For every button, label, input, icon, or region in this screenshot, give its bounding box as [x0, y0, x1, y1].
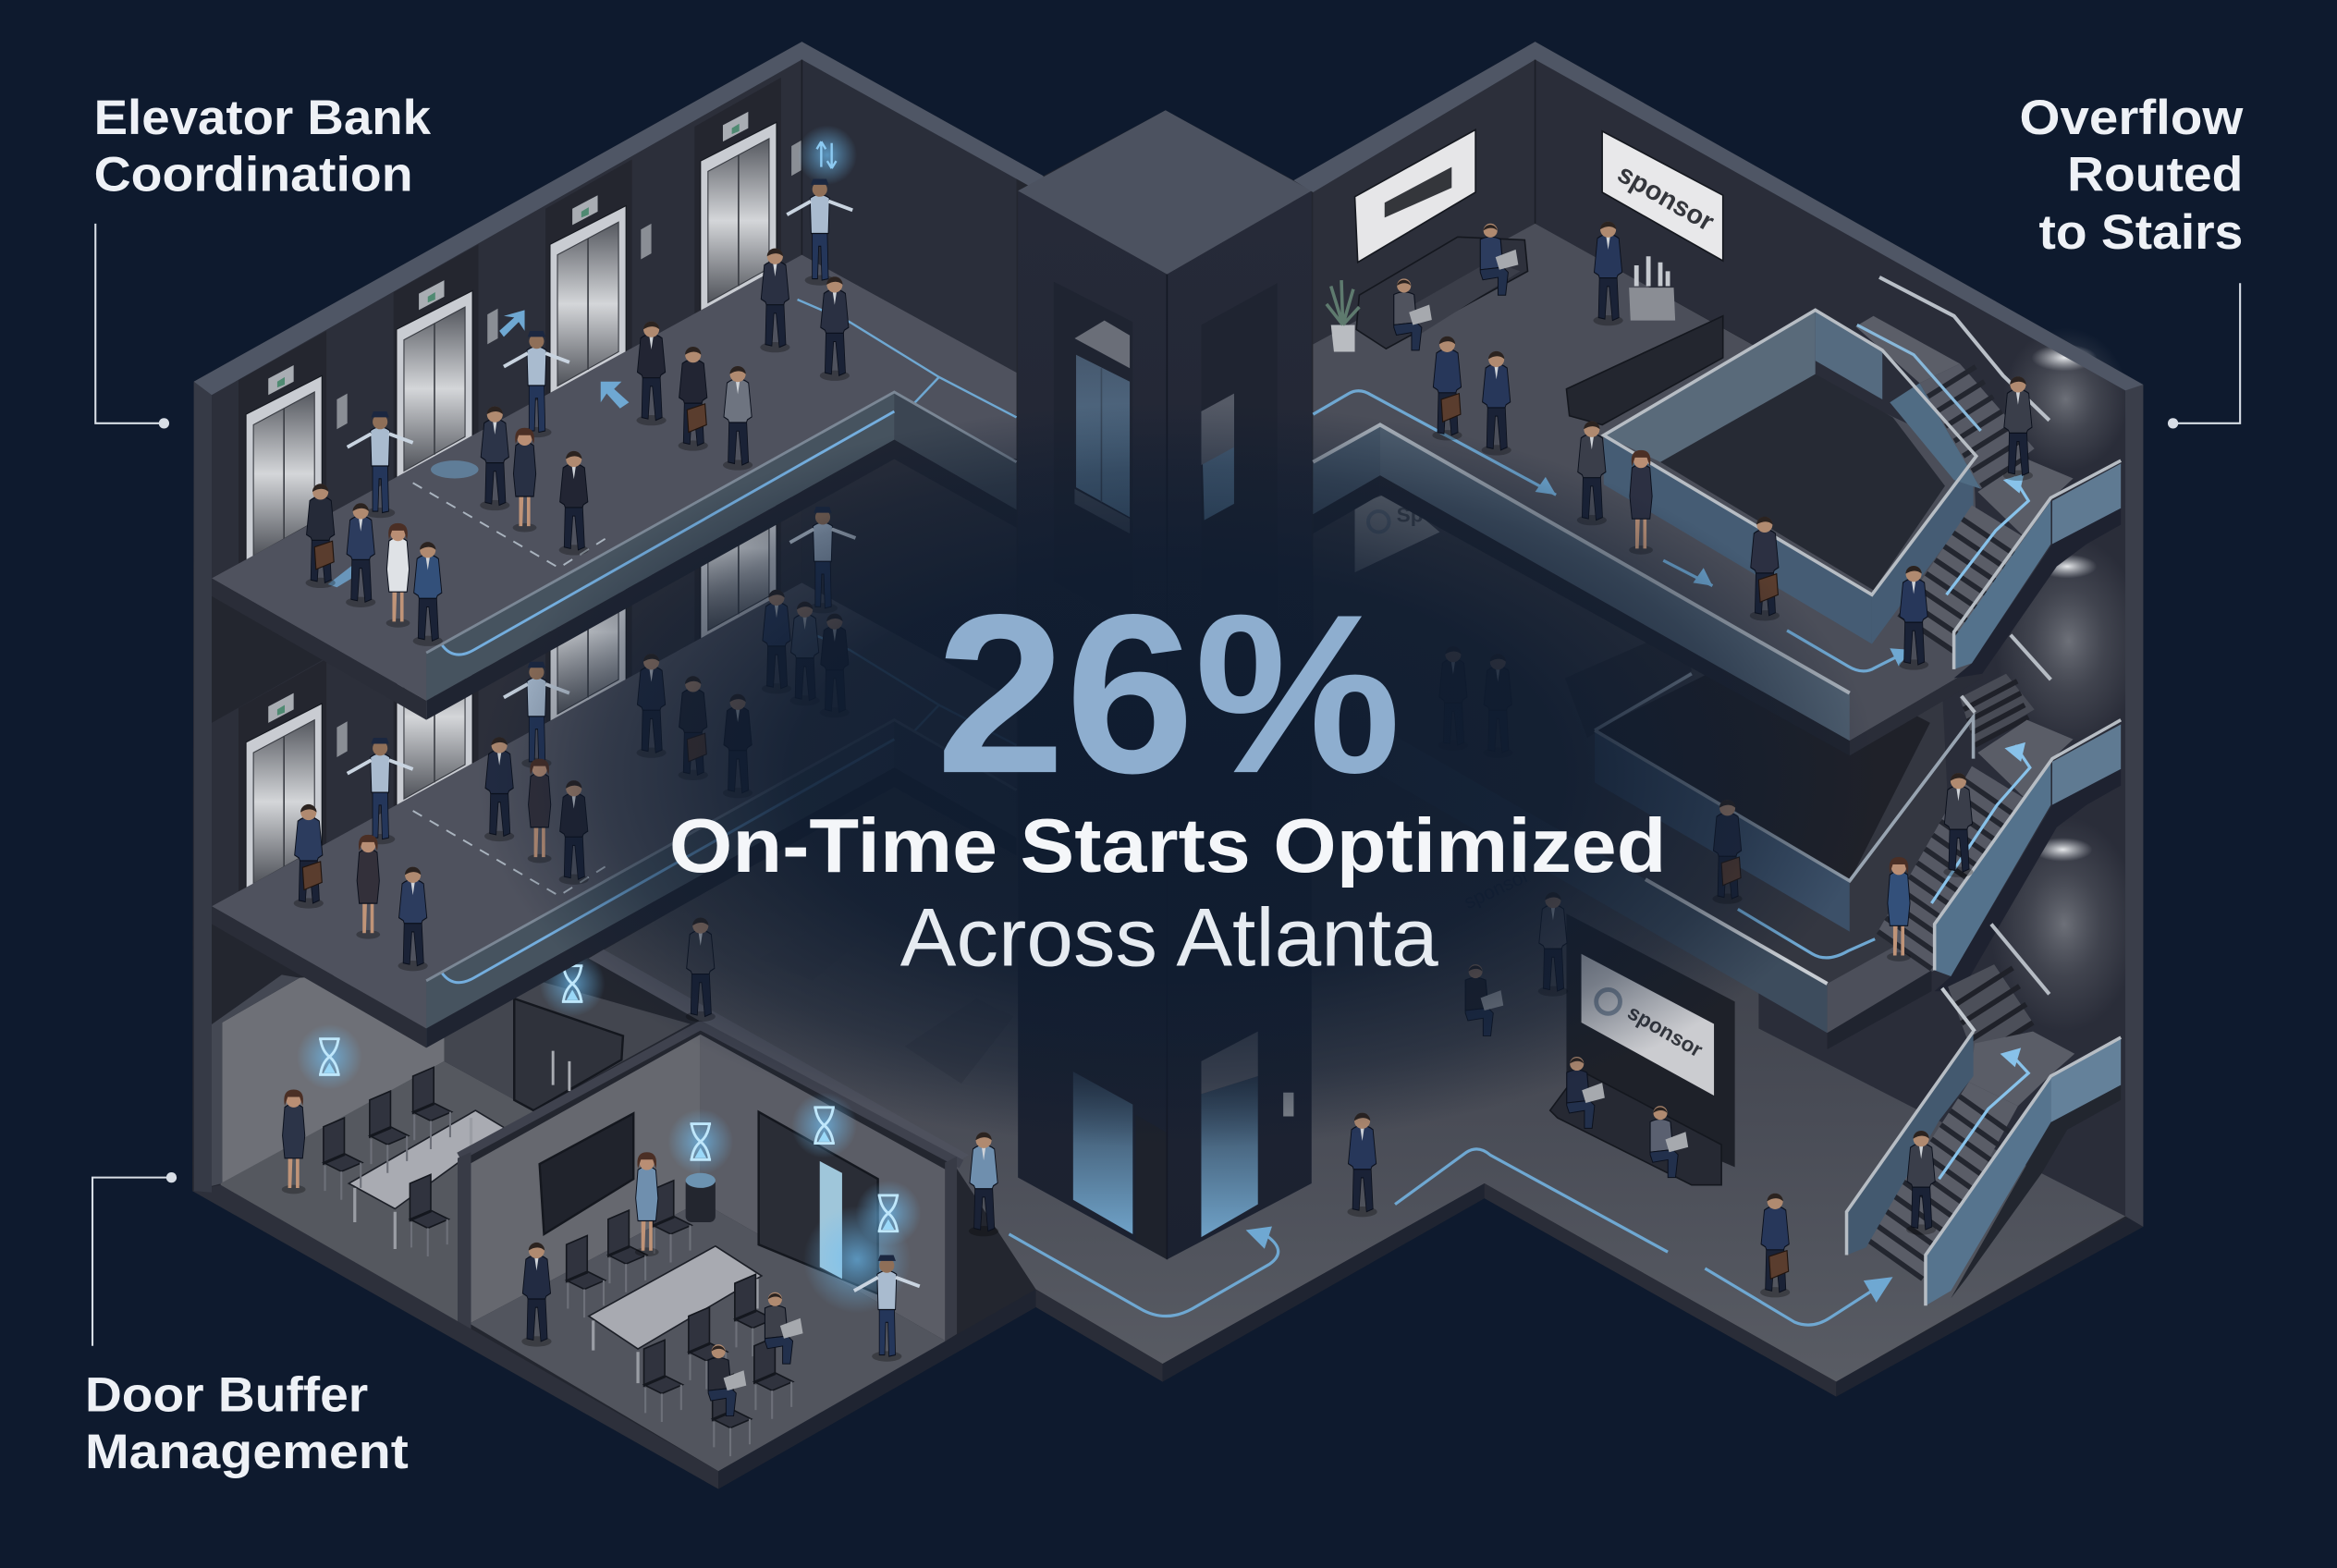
- panel: second floor elevator bank: [212, 387, 1017, 1047]
- double doors: rear: [514, 998, 623, 1110]
- floor route arrows: top floor: [328, 310, 629, 587]
- people: right wing: [1347, 222, 2033, 1297]
- floor: [1313, 224, 1982, 741]
- panel: front meeting room: [458, 949, 969, 1471]
- void rail loop: [1604, 310, 1976, 594]
- people: second floor queue: [294, 507, 855, 971]
- label: elevator bank coordination: Elevator Bank: [94, 91, 431, 145]
- staircase: flight C: [1847, 1032, 2121, 1305]
- label: door buffer management: [85, 1368, 409, 1479]
- label: overflow routed to stairs: to Stairs: [2039, 205, 2243, 260]
- sponsor board: ground floor: sponsor: [1623, 1000, 1707, 1061]
- headline: across atlanta: Across Atlanta: [900, 892, 1439, 984]
- icon: hourglass above rear door: [540, 951, 606, 1016]
- label: door buffer management: Management: [85, 1425, 409, 1479]
- staircase: upper flight: [1855, 277, 2049, 489]
- lower glass lift left: [1073, 1072, 1167, 1259]
- staircase: flight B: [1850, 717, 2121, 991]
- panel: ground floor right and cafe: [589, 716, 2143, 1397]
- panel: right end wall with lamps: [1758, 194, 2143, 1227]
- label: overflow routed to stairs: Overflow: [2020, 91, 2244, 145]
- label: overflow routed to stairs: [2020, 91, 2244, 260]
- sponsor board: top floor: sponsor: [1612, 159, 1719, 238]
- corridor route line: [1313, 391, 1899, 671]
- headline: 26%: 26%: [936, 567, 1401, 820]
- icon: up-down arrows: [798, 125, 857, 185]
- leader line: overflow: [2168, 283, 2240, 428]
- stair void: [1604, 310, 1974, 643]
- table: left room: [349, 1110, 506, 1249]
- sponsor board: second floor: [1355, 492, 1439, 572]
- leader line: elevator: [95, 224, 169, 428]
- sofa: top floor: [1356, 237, 1528, 349]
- dim sign: sponsor: [1461, 865, 1533, 913]
- panel: left meeting room: [210, 951, 690, 1331]
- panel: tower: [1018, 110, 1312, 1259]
- sofa: ground floor: [1550, 1071, 1721, 1185]
- upper lift shaft left: [1054, 282, 1132, 626]
- icon: hourglass above bin: [667, 1109, 733, 1174]
- ground floor route arrows: [1009, 1149, 1890, 1325]
- upper lift shaft right: [1201, 283, 1278, 670]
- panel: top floor right wing: [1293, 42, 2143, 755]
- sofa: facing void: [1566, 316, 1723, 424]
- double doors: front room: [759, 1112, 911, 1313]
- pedestal: [1629, 256, 1675, 321]
- label: elevator bank coordination: Coordination: [94, 147, 413, 202]
- chairs: left room: [324, 1067, 452, 1256]
- upper glass lift right: [1201, 394, 1234, 521]
- label: door buffer management: Door Buffer: [85, 1368, 368, 1423]
- sponsor board: blank: [1355, 129, 1475, 263]
- leader line: door buffer: [92, 1172, 177, 1346]
- ground floor base strip left: [192, 1185, 1036, 1489]
- corridor parapet: [1313, 424, 1982, 755]
- staircase: connector flight: [1960, 635, 2050, 745]
- plant: [1327, 280, 1359, 351]
- sponsor board: second floor: Sp: [1397, 503, 1424, 526]
- staircase: lower connector: [1942, 925, 2049, 1060]
- center vignette: [447, 373, 1908, 1207]
- upper glass lift left: [1074, 321, 1130, 533]
- icon: hourglass above door: [791, 1093, 857, 1158]
- chairs: front room: [567, 1181, 793, 1456]
- panel: ground floor right furniture and sponsor wall: [1461, 865, 1735, 1185]
- left outer wall edge and roof cap: [194, 42, 1044, 1193]
- panel: second floor right wing: [1313, 373, 1974, 1049]
- sponsor board: ground floor: [1582, 954, 1714, 1096]
- people: top floor queue: [306, 178, 852, 646]
- icon: hourglass beside door: [855, 1181, 921, 1246]
- bin: [686, 1173, 716, 1222]
- people: meeting rooms: [282, 917, 998, 1416]
- building silhouette: [192, 42, 2143, 1489]
- icon: hourglass left room: [297, 1024, 362, 1089]
- headline: on-time starts: On-Time Starts Optimized: [669, 804, 1666, 888]
- table: front room: [589, 1246, 762, 1383]
- panel: top floor elevator bank: [212, 59, 1017, 720]
- lower glass lift right: [1201, 1032, 1293, 1237]
- wall screen: [540, 1113, 633, 1234]
- staircase: flight A: [1899, 459, 2121, 679]
- label: elevator bank coordination: [94, 91, 431, 202]
- label: overflow routed to stairs: Routed: [2067, 147, 2243, 202]
- sponsor board: top floor: [1602, 131, 1723, 261]
